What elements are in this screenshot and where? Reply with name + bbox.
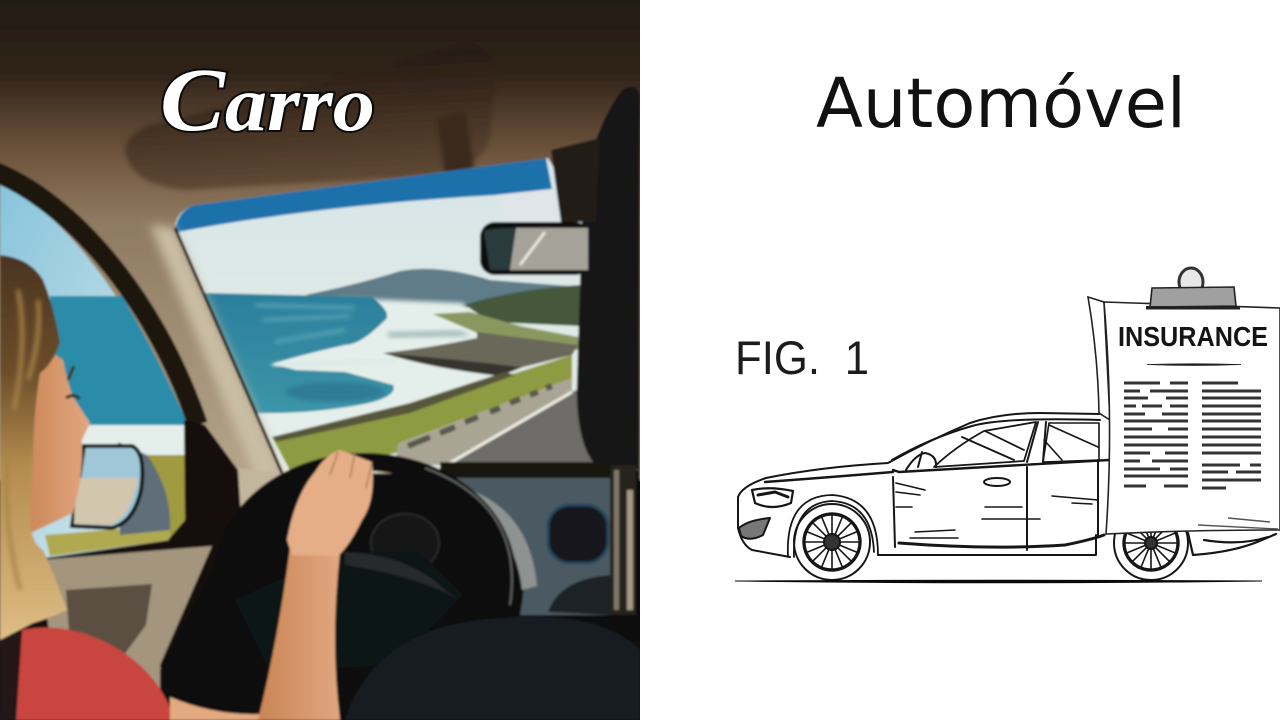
mirror reflection xyxy=(74,478,138,525)
insurance document xyxy=(1088,268,1280,534)
knuckles xyxy=(330,452,372,488)
side window frame xyxy=(0,170,198,425)
surf base xyxy=(341,295,468,310)
dark beach crescent xyxy=(383,353,523,376)
side mirror backdrop xyxy=(145,455,186,540)
front window xyxy=(934,422,1036,467)
pillar xyxy=(1027,422,1046,462)
wheel arch xyxy=(788,495,878,557)
dark shoulder shade xyxy=(0,630,22,720)
rearview mirror xyxy=(480,222,590,275)
headlight inner xyxy=(758,492,788,497)
grassy roadside xyxy=(272,355,572,476)
windshield frame xyxy=(175,228,282,473)
paper shading xyxy=(1198,518,1278,529)
wheel spoke hub xyxy=(235,552,463,672)
lit A pillar edge xyxy=(150,225,282,492)
wheel hub highlight xyxy=(345,552,460,600)
mountains xyxy=(305,269,582,310)
headrest pole xyxy=(610,465,636,615)
blue tint band xyxy=(175,158,552,232)
clip base xyxy=(1146,306,1240,310)
beach xyxy=(383,332,578,367)
hood line xyxy=(765,460,1109,482)
woman's hair xyxy=(0,255,67,640)
door shading strokes xyxy=(896,483,1098,538)
hair streaks xyxy=(6,290,39,590)
headlight xyxy=(752,488,793,507)
left column text lines xyxy=(1124,383,1188,486)
door handle xyxy=(984,478,1010,486)
woman's hand xyxy=(287,450,373,556)
dashboard dark xyxy=(160,470,640,720)
sun strip xyxy=(498,188,551,196)
woman's face and neck xyxy=(20,345,90,540)
surf through side window xyxy=(70,425,185,458)
side mirror xyxy=(72,442,170,535)
side window view xyxy=(0,183,187,560)
sea through side window xyxy=(50,296,185,425)
passenger seat xyxy=(345,617,640,720)
lower cabin base xyxy=(0,480,660,720)
shore wall xyxy=(272,372,515,442)
steering wheel xyxy=(223,462,512,692)
sea in windshield xyxy=(205,293,394,413)
lower pillar wedge xyxy=(236,468,282,508)
woman's forearm xyxy=(258,548,340,720)
headrest xyxy=(577,87,640,470)
woman's eye xyxy=(66,366,80,399)
guardrail posts xyxy=(408,386,552,446)
rear window xyxy=(1043,423,1099,462)
ceiling and headliner xyxy=(0,0,660,480)
ground line xyxy=(735,580,1262,583)
grass through side window xyxy=(45,525,170,556)
windshield view xyxy=(175,158,595,476)
paper sheet body xyxy=(1104,302,1280,534)
panel: white patent drawing xyxy=(640,0,1280,720)
road centre line xyxy=(450,392,572,463)
label: FIG. 1: FIG. xyxy=(735,332,820,384)
driver silhouette xyxy=(906,452,936,470)
lower sill xyxy=(899,535,1104,547)
red shirt xyxy=(16,628,175,720)
panel: car interior photo xyxy=(0,0,660,720)
front window reflections xyxy=(962,431,1024,460)
green hill xyxy=(465,285,580,326)
gauge cluster xyxy=(371,514,439,572)
silver crescent xyxy=(455,488,537,590)
fog light xyxy=(739,518,770,539)
right column text lines xyxy=(1202,383,1261,488)
wave band xyxy=(388,330,470,338)
surf streak xyxy=(269,360,282,369)
road xyxy=(455,389,594,464)
clipboard clip xyxy=(1150,287,1236,307)
door panel xyxy=(45,544,214,690)
rule under heading xyxy=(1147,364,1241,366)
roof double line xyxy=(892,419,1100,460)
dash top edge xyxy=(440,462,615,477)
car line drawing xyxy=(738,413,1276,580)
darker sea swirl xyxy=(285,382,385,402)
sun visor xyxy=(124,86,492,192)
dash panel xyxy=(450,478,612,615)
sea streaks xyxy=(255,305,355,342)
rear bumper xyxy=(1188,533,1276,555)
mirror road line xyxy=(520,232,545,265)
dash vent xyxy=(548,505,608,563)
car body outline xyxy=(738,413,1100,557)
headland xyxy=(433,312,578,350)
heading: INSURANCE: INSURANCE xyxy=(1118,321,1268,352)
paper fold xyxy=(1088,297,1110,420)
label: FIG. 1: 1 xyxy=(845,332,869,384)
door seams xyxy=(893,460,1098,550)
title: Automóvel: Automóvel xyxy=(816,64,1186,144)
mirror mount xyxy=(551,138,600,222)
light road shoulder xyxy=(395,378,572,465)
rear wheel xyxy=(1114,506,1188,580)
dark lower pillar xyxy=(168,420,241,546)
woman's upper arm xyxy=(170,697,262,720)
visor strap xyxy=(438,116,476,172)
clip ring xyxy=(1179,268,1203,296)
front wheel xyxy=(794,504,870,580)
title: Carro: Carro xyxy=(160,51,375,150)
lower vent xyxy=(548,575,612,615)
